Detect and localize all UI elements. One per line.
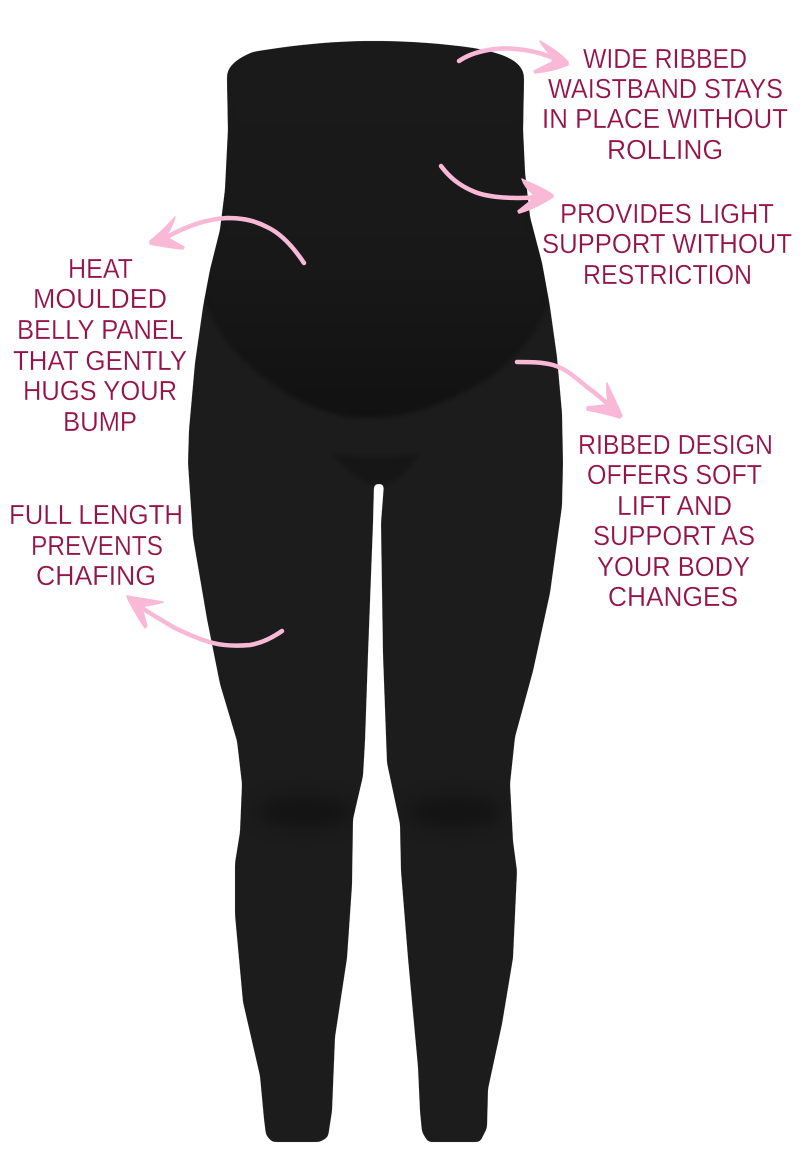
text: waistband — [542, 43, 788, 165]
text: ribbed design — [578, 429, 773, 612]
text: ribbed design: LIFT AND — [617, 490, 732, 521]
arrow: waistband — [459, 41, 568, 73]
text: ribbed design: YOUR BODY — [597, 551, 750, 582]
text: belly panel: HUGS YOUR — [23, 375, 177, 406]
arrow: ribbed design — [517, 362, 622, 418]
gusset — [374, 484, 384, 492]
text: ribbed design: OFFERS SOFT — [587, 459, 762, 490]
leggings — [180, 40, 570, 1142]
arrow: full length — [127, 596, 282, 646]
arrow: light support — [441, 166, 553, 213]
text: belly panel: BUMP — [63, 406, 137, 437]
text: light support: RESTRICTION — [583, 259, 752, 290]
text: light support — [542, 198, 792, 290]
text: waistband: IN PLACE WITHOUT — [542, 103, 788, 134]
text: belly panel: HEAT — [68, 253, 133, 284]
text: ribbed design: SUPPORT AS — [593, 520, 755, 551]
text: ribbed design: CHANGES — [608, 581, 738, 612]
text: full length: FULL LENGTH — [9, 499, 183, 530]
text: belly panel: MOULDED — [33, 283, 167, 314]
text: full length: CHAFING — [36, 560, 156, 591]
text: belly panel — [13, 253, 187, 437]
text: belly panel: THAT GENTLY — [13, 345, 187, 376]
arrow: belly panel — [150, 217, 304, 263]
text: belly panel: BELLY PANEL — [17, 314, 183, 345]
text: full length: PREVENTS — [31, 530, 163, 561]
knee shadows — [352, 798, 512, 827]
text: waistband: WIDE RIBBED — [583, 43, 747, 74]
text: full length — [9, 499, 183, 591]
text: light support: PROVIDES LIGHT — [560, 198, 774, 229]
belly panel — [204, 40, 550, 416]
text: waistband: WAISTBAND STAYS — [548, 73, 783, 104]
text: ribbed design: RIBBED DESIGN — [578, 429, 773, 460]
text: waistband: ROLLING — [607, 134, 723, 165]
